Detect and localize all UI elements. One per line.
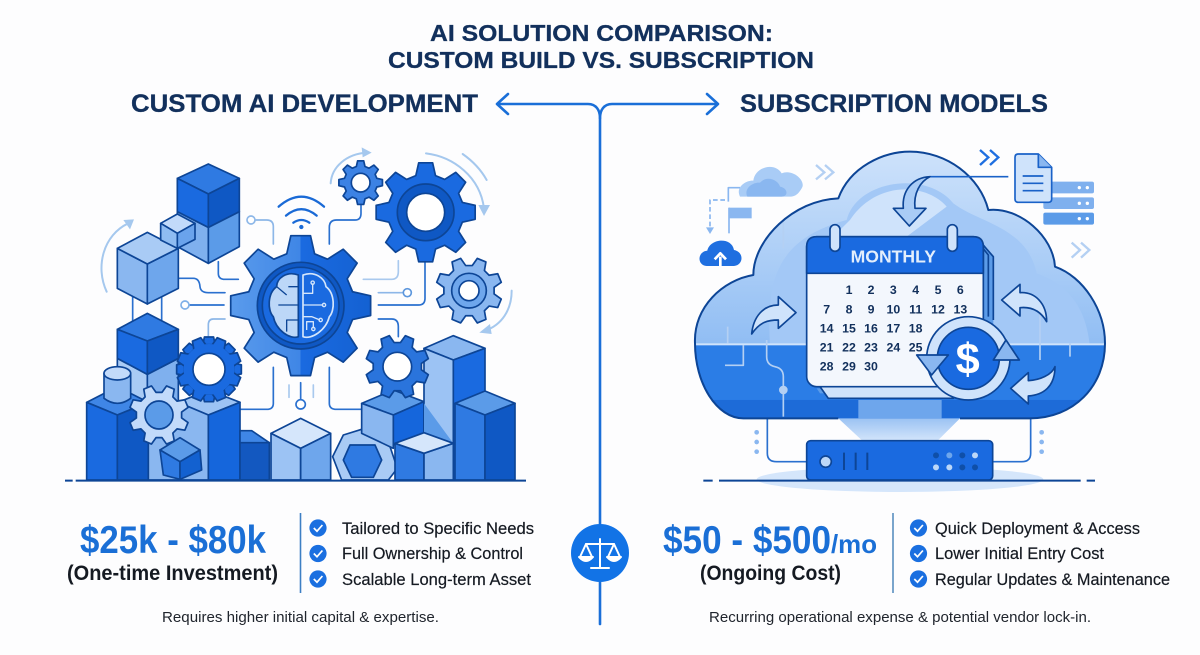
icon: curved arrow to calendar	[893, 177, 1008, 226]
calendar dates: 11	[909, 302, 922, 316]
calendar dates: 9	[868, 302, 875, 316]
gears	[120, 161, 512, 454]
divider	[300, 513, 302, 593]
calendar dates: 15	[842, 322, 856, 336]
calendar dates	[820, 283, 967, 374]
calendar dates: 14	[820, 322, 834, 336]
calendar dates: 16	[864, 322, 878, 336]
icon: dollar renewal badge	[917, 317, 1019, 400]
icon: dollar renewal badge: $	[956, 336, 980, 384]
calendar dates: 18	[909, 322, 923, 336]
heading: subscription models: SUBSCRIPTION MODELS	[740, 90, 1048, 118]
price note: (One-time Investment)	[67, 562, 278, 585]
illustration: subscription cloud	[690, 147, 1110, 492]
icon: server stack	[1043, 182, 1094, 225]
cloud	[690, 147, 1110, 422]
calendar dates: 5	[935, 283, 942, 297]
illustration: custom AI development	[65, 147, 526, 481]
icon: central gear with AI brain	[231, 236, 371, 376]
title: CUSTOM BUILD VS. SUBSCRIPTION	[388, 47, 814, 73]
icon: calendar	[807, 225, 993, 398]
calendar dates: 30	[864, 360, 878, 374]
calendar dates: 7	[823, 302, 830, 316]
benefit: entry cost: Lower Initial Entry Cost	[935, 544, 1104, 563]
stacked cubes	[117, 164, 239, 403]
calendar dates: 8	[846, 302, 853, 316]
calendar dates: 6	[957, 283, 964, 297]
baseline	[703, 478, 1095, 484]
rotation arrows	[101, 147, 512, 334]
glow under server	[757, 467, 1043, 492]
calendar dates: 25	[909, 341, 923, 355]
icon: document	[1015, 154, 1052, 202]
calendar dates: 17	[886, 322, 900, 336]
price: custom AI: $25k - $80k	[80, 519, 266, 562]
icon: server unit	[807, 441, 993, 480]
calendar dates: 2	[868, 283, 875, 297]
calendar dates: 4	[912, 283, 919, 297]
price: subscription: $50 - $500	[663, 519, 831, 562]
baseline	[65, 478, 526, 484]
calendar dates: 24	[886, 341, 900, 355]
heading: custom AI development: CUSTOM AI DEVELOPMENT	[131, 90, 478, 118]
icon: small cloud and flag	[706, 167, 803, 234]
panel: subscription cost summary	[663, 513, 1170, 626]
icon: upload cloud	[699, 241, 741, 266]
title: AI SOLUTION COMPARISON:	[430, 20, 773, 46]
circuit connector lines	[133, 203, 425, 409]
bar columns	[87, 336, 515, 480]
icon: balance scale badge	[571, 524, 629, 582]
panel: custom AI cost summary	[67, 513, 534, 626]
calendar dates: 3	[890, 283, 897, 297]
calendar dates: 22	[842, 341, 856, 355]
price note: (Ongoing Cost)	[700, 562, 841, 585]
funnel below cloud	[838, 400, 960, 442]
benefit: scalable: Scalable Long-term Asset	[342, 570, 531, 589]
connectors to server	[767, 418, 1031, 462]
calendar dates: 23	[864, 341, 878, 355]
icon: wifi signal	[279, 197, 324, 228]
chevrons	[816, 150, 1089, 258]
title	[388, 20, 814, 73]
caveat: Requires higher initial capital & expertise.	[162, 609, 439, 626]
divider	[892, 513, 894, 593]
icon: recurring arrows around cloud	[752, 284, 1055, 404]
calendar dates: 13	[953, 302, 967, 316]
icon: calendar: MONTHLY	[851, 247, 936, 267]
dotted accents	[754, 430, 1044, 454]
calendar dates: 12	[931, 302, 945, 316]
calendar dates: 1	[846, 283, 853, 297]
benefit: ownership: Full Ownership & Control	[342, 544, 523, 563]
benefit: tailored: Tailored to Specific Needs	[342, 519, 534, 538]
calendar dates: 28	[820, 360, 834, 374]
calendar dates: 21	[820, 341, 834, 355]
calendar dates: 29	[842, 360, 856, 374]
benefit: deployment: Quick Deployment & Access	[935, 519, 1140, 538]
caveat: Recurring operational expense & potential vendor lock-in.	[709, 609, 1091, 626]
arrow: central divider with two-way arrow	[497, 94, 718, 624]
calendar dates: 10	[886, 302, 900, 316]
benefit: updates: Regular Updates & Maintenance	[935, 570, 1170, 589]
price unit: /mo	[831, 529, 877, 559]
